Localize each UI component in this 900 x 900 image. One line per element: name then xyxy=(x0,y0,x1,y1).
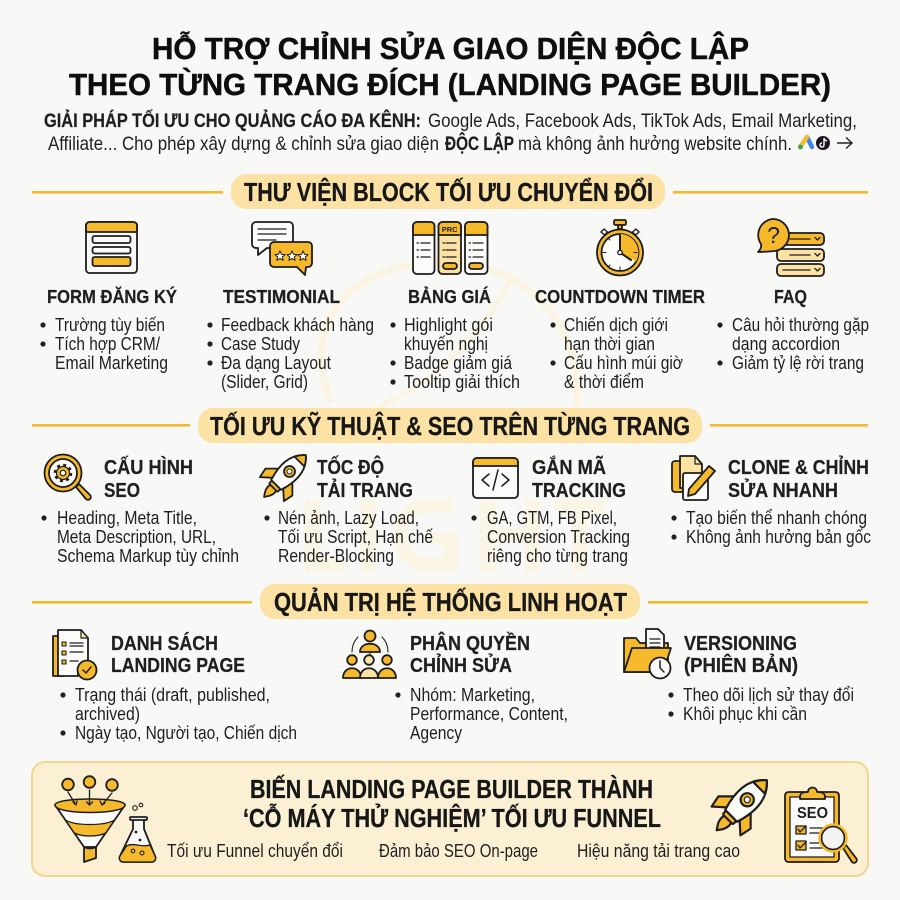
icon: folder and clock xyxy=(624,629,671,678)
bullet list: Theo dõi lịch sử thay đổi xyxy=(683,685,854,705)
panel: danh sách landing page xyxy=(53,630,297,743)
bullet list: Render-Blocking xyxy=(278,546,394,566)
bullet list: Tooltip giải thích xyxy=(404,372,520,392)
bullet list: Ngày tạo, Người tạo, Chiến dịch xyxy=(75,723,297,743)
intro text: Affiliate... Cho phép xây dựng & chỉnh sửa giao diện xyxy=(48,133,439,155)
icon: copy and pencil xyxy=(672,456,715,500)
bullet list: Highlight gói xyxy=(404,315,493,335)
bullet list: Agency xyxy=(410,723,462,743)
icon: faq accordion xyxy=(758,219,824,276)
panel: tốc độ tải trang: TẢI TRANG xyxy=(317,479,413,502)
bullet list: Schema Markup tùy chỉnh xyxy=(57,546,239,566)
bullet list xyxy=(471,508,630,566)
panel: danh sách landing page: LANDING PAGE xyxy=(111,655,245,677)
intro text: mà không ảnh hưởng website chính. xyxy=(518,133,792,155)
bullet list: Cấu hình múi giờ xyxy=(564,353,683,373)
section heading: system management: QUẢN TRỊ HỆ THỐNG LINH HOẠT xyxy=(274,587,627,617)
icon: flask xyxy=(119,803,156,862)
panel: form đăng ký xyxy=(40,222,177,373)
panel: phân quyền chỉnh sửa: PHÂN QUYỀN xyxy=(410,631,530,655)
section heading: block library: THƯ VIỆN BLOCK TỐI ƯU CHUYỂN ĐỔI xyxy=(244,177,653,207)
bullet list xyxy=(395,685,568,743)
panel: tốc độ tải trang: TỐC ĐỘ xyxy=(317,455,384,479)
icon: google ads xyxy=(798,137,812,149)
icon: team permissions xyxy=(343,630,396,678)
panel: versioning: (PHIÊN BẢN) xyxy=(684,653,798,677)
panel: form đăng ký: FORM ĐĂNG KÝ xyxy=(47,286,177,307)
bullet list: Badge giảm giá xyxy=(404,353,513,373)
icon: seo clipboard: SEO xyxy=(797,805,828,822)
bullet list: Case Study xyxy=(221,334,300,354)
intro text: ĐỘC LẬP xyxy=(445,131,514,155)
intro text: GIẢI PHÁP TỐI ƯU CHO QUẢNG CÁO ĐA KÊNH: xyxy=(44,108,421,132)
section heading: technical and seo xyxy=(32,408,868,443)
panel: phân quyền chỉnh sửa xyxy=(343,630,568,743)
bullet list: Nén ảnh, Lazy Load, xyxy=(278,508,419,528)
panel: gắn mã tracking xyxy=(471,455,630,566)
section heading: technical and seo: TỐI ƯU KỸ THUẬT & SEO TRÊN TỪNG TRANG xyxy=(210,411,690,441)
bullet list: archived) xyxy=(75,704,140,724)
panel: versioning xyxy=(624,629,854,724)
panel: testimonial xyxy=(207,222,374,392)
bullet list: Câu hỏi thường gặp xyxy=(732,315,869,335)
icon: funnel xyxy=(55,776,125,862)
icon: pricing table xyxy=(413,222,488,274)
icon: list document xyxy=(53,630,96,680)
bullet list: khuyến nghị xyxy=(404,334,488,354)
bullet list xyxy=(264,508,433,566)
bullet list: Tối ưu Script, Hạn chế xyxy=(278,527,433,547)
panel: cấu hình seo xyxy=(41,454,239,566)
icon: rocket xyxy=(701,764,783,846)
bullet list: Feedback khách hàng xyxy=(221,315,374,335)
panel: testimonial: TESTIMONIAL xyxy=(223,287,340,307)
bullet list xyxy=(207,315,374,392)
panel: bảng giá xyxy=(390,222,520,392)
panel: tốc độ tải trang xyxy=(251,442,433,566)
panel: bottom callout xyxy=(32,762,868,876)
panel: bảng giá: BẢNG GIÁ xyxy=(408,286,491,307)
bullet list: Heading, Meta Title, xyxy=(57,508,197,528)
bullet list: Conversion Tracking xyxy=(487,527,630,547)
panel: cấu hình seo: SEO xyxy=(104,480,140,502)
panel: faq: FAQ xyxy=(774,287,807,307)
callout benefits: Hiệu năng tải trang cao xyxy=(577,841,740,861)
icon: testimonial bubbles xyxy=(252,222,312,275)
callout heading xyxy=(243,774,661,833)
bullet list: Tạo biến thể nhanh chóng xyxy=(686,508,867,528)
panel: clone và chỉnh sửa xyxy=(671,456,871,547)
icon: rocket xyxy=(251,442,319,510)
callout heading: ‘CỖ MÁY THỬ NGHIỆM’ TỐI ƯU FUNNEL xyxy=(243,802,661,833)
bullet list xyxy=(668,685,854,724)
panel: danh sách landing page: DANH SÁCH xyxy=(111,632,218,655)
bullet list: Không ảnh hưởng bản gốc xyxy=(686,527,871,547)
bullet list: Nhóm: Marketing, xyxy=(410,685,535,705)
callout benefits xyxy=(167,841,740,861)
bullet list xyxy=(41,508,239,566)
panel: clone và chỉnh sửa: SỬA NHANH xyxy=(728,478,838,502)
section heading: block library xyxy=(32,174,868,209)
section heading: system management xyxy=(32,584,868,619)
icon: stopwatch xyxy=(597,220,643,276)
panel: versioning: VERSIONING xyxy=(684,633,797,655)
bullet list xyxy=(60,685,297,743)
bullet list: Email Marketing xyxy=(55,353,168,373)
bullet list xyxy=(717,315,869,373)
bullet list: Trạng thái (draft, published, xyxy=(75,685,270,705)
title xyxy=(69,30,831,102)
callout benefits: Đảm bảo SEO On-page xyxy=(379,841,538,861)
panel: bảng giá: PRC xyxy=(442,225,458,234)
bullet list: Giảm tỷ lệ rời trang xyxy=(732,353,864,373)
arrow xyxy=(837,138,852,148)
panel: gắn mã tracking: TRACKING xyxy=(532,480,626,502)
bullet list xyxy=(671,508,871,547)
bullet list: hạn thời gian xyxy=(564,334,655,354)
title: HỖ TRỢ CHỈNH SỬA GIAO DIỆN ĐỘC LẬP xyxy=(152,30,749,66)
panel: clone và chỉnh sửa: CLONE & CHỈNH xyxy=(728,456,869,479)
icon: form xyxy=(86,222,137,273)
bullet list: Performance, Content, xyxy=(410,704,568,724)
bullet list xyxy=(390,315,520,392)
intro text xyxy=(44,108,857,155)
callout benefits: Tối ưu Funnel chuyển đổi xyxy=(167,841,343,861)
bullet list xyxy=(40,315,168,373)
bullet list: (Slider, Grid) xyxy=(221,372,308,392)
bullet list: Khôi phục khi cần xyxy=(683,704,807,724)
icon: seo clipboard xyxy=(785,788,857,863)
bullet list: dạng accordion xyxy=(732,334,840,354)
panel: phân quyền chỉnh sửa: CHỈNH SỬA xyxy=(410,653,512,677)
bullet list xyxy=(550,315,683,392)
panel: gắn mã tracking: GẮN MÃ xyxy=(532,455,606,479)
bullet list: Tích hợp CRM/ xyxy=(55,334,160,354)
bullet list: GA, GTM, FB Pixel, xyxy=(487,508,617,528)
panel: countdown timer: COUNTDOWN TIMER xyxy=(535,287,705,307)
panel: faq: ? xyxy=(767,222,780,248)
icon: tiktok xyxy=(816,136,830,150)
panel: cấu hình seo: CẤU HÌNH xyxy=(104,456,193,479)
bullet list: Trường tùy biến xyxy=(55,315,165,335)
bullet list: & thời điểm xyxy=(564,372,644,392)
bullet list: riêng cho từng trang xyxy=(487,546,628,566)
bullet list: Đa dạng Layout xyxy=(221,353,331,373)
title: THEO TỪNG TRANG ĐÍCH (LANDING PAGE BUILDER) xyxy=(69,66,831,102)
panel: faq xyxy=(717,219,869,373)
panel: countdown timer xyxy=(535,220,705,392)
bullet list: Meta Description, URL, xyxy=(57,527,216,547)
icon: seo magnifier xyxy=(44,454,91,500)
icon: code window xyxy=(473,458,518,498)
bullet list: Chiến dịch giới xyxy=(564,315,668,335)
callout heading: BIẾN LANDING PAGE BUILDER THÀNH xyxy=(250,774,653,804)
